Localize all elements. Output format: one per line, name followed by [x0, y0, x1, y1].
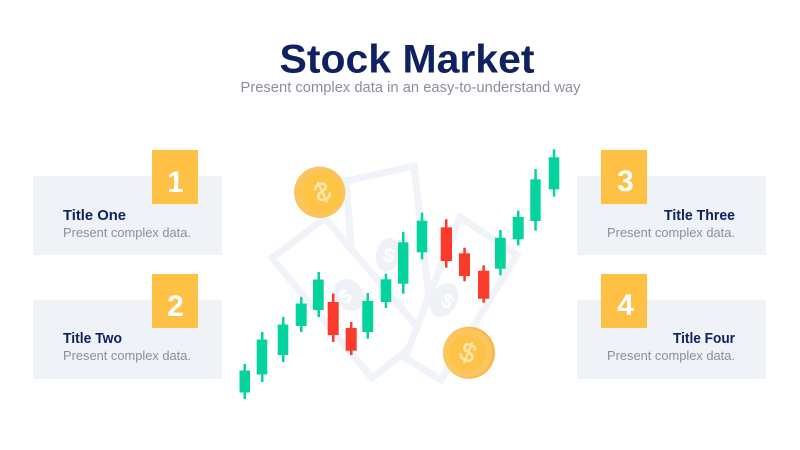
- panel: title two: 2: [167, 290, 184, 323]
- panel: title three: Title Three: [664, 207, 735, 224]
- candlestick chart: [240, 149, 559, 399]
- title: Stock Market: [280, 38, 534, 82]
- icon: coin top: $: [309, 175, 336, 209]
- panel: title one: Title One: [63, 207, 126, 224]
- panel: title one: 1: [167, 166, 184, 199]
- subtitle: Present complex data in an easy-to-understand way: [240, 80, 581, 96]
- panel: title four: Title Four: [673, 330, 735, 347]
- panel: title four: [577, 274, 766, 379]
- icon: coin bottom: $: [455, 336, 481, 369]
- panel: title three: 3: [617, 165, 634, 198]
- banknotes illustration: $: [437, 289, 457, 314]
- panel: title two: [33, 274, 222, 379]
- panel: title one: [33, 150, 222, 255]
- banknotes illustration: $: [335, 285, 356, 309]
- icon: coin bottom: [443, 327, 495, 379]
- panel: title two: Title Two: [63, 330, 122, 347]
- icon: coin top: [294, 167, 345, 218]
- panel: title two: Present complex data.: [63, 348, 191, 363]
- banknotes illustration: $: [382, 244, 396, 268]
- panel: title four: Present complex data.: [607, 348, 735, 363]
- panel: title one: Present complex data.: [63, 225, 191, 240]
- banknotes illustration: [272, 166, 517, 380]
- panel: title four: 4: [617, 289, 634, 322]
- panel: title three: [577, 150, 766, 255]
- panel: title three: Present complex data.: [607, 225, 735, 240]
